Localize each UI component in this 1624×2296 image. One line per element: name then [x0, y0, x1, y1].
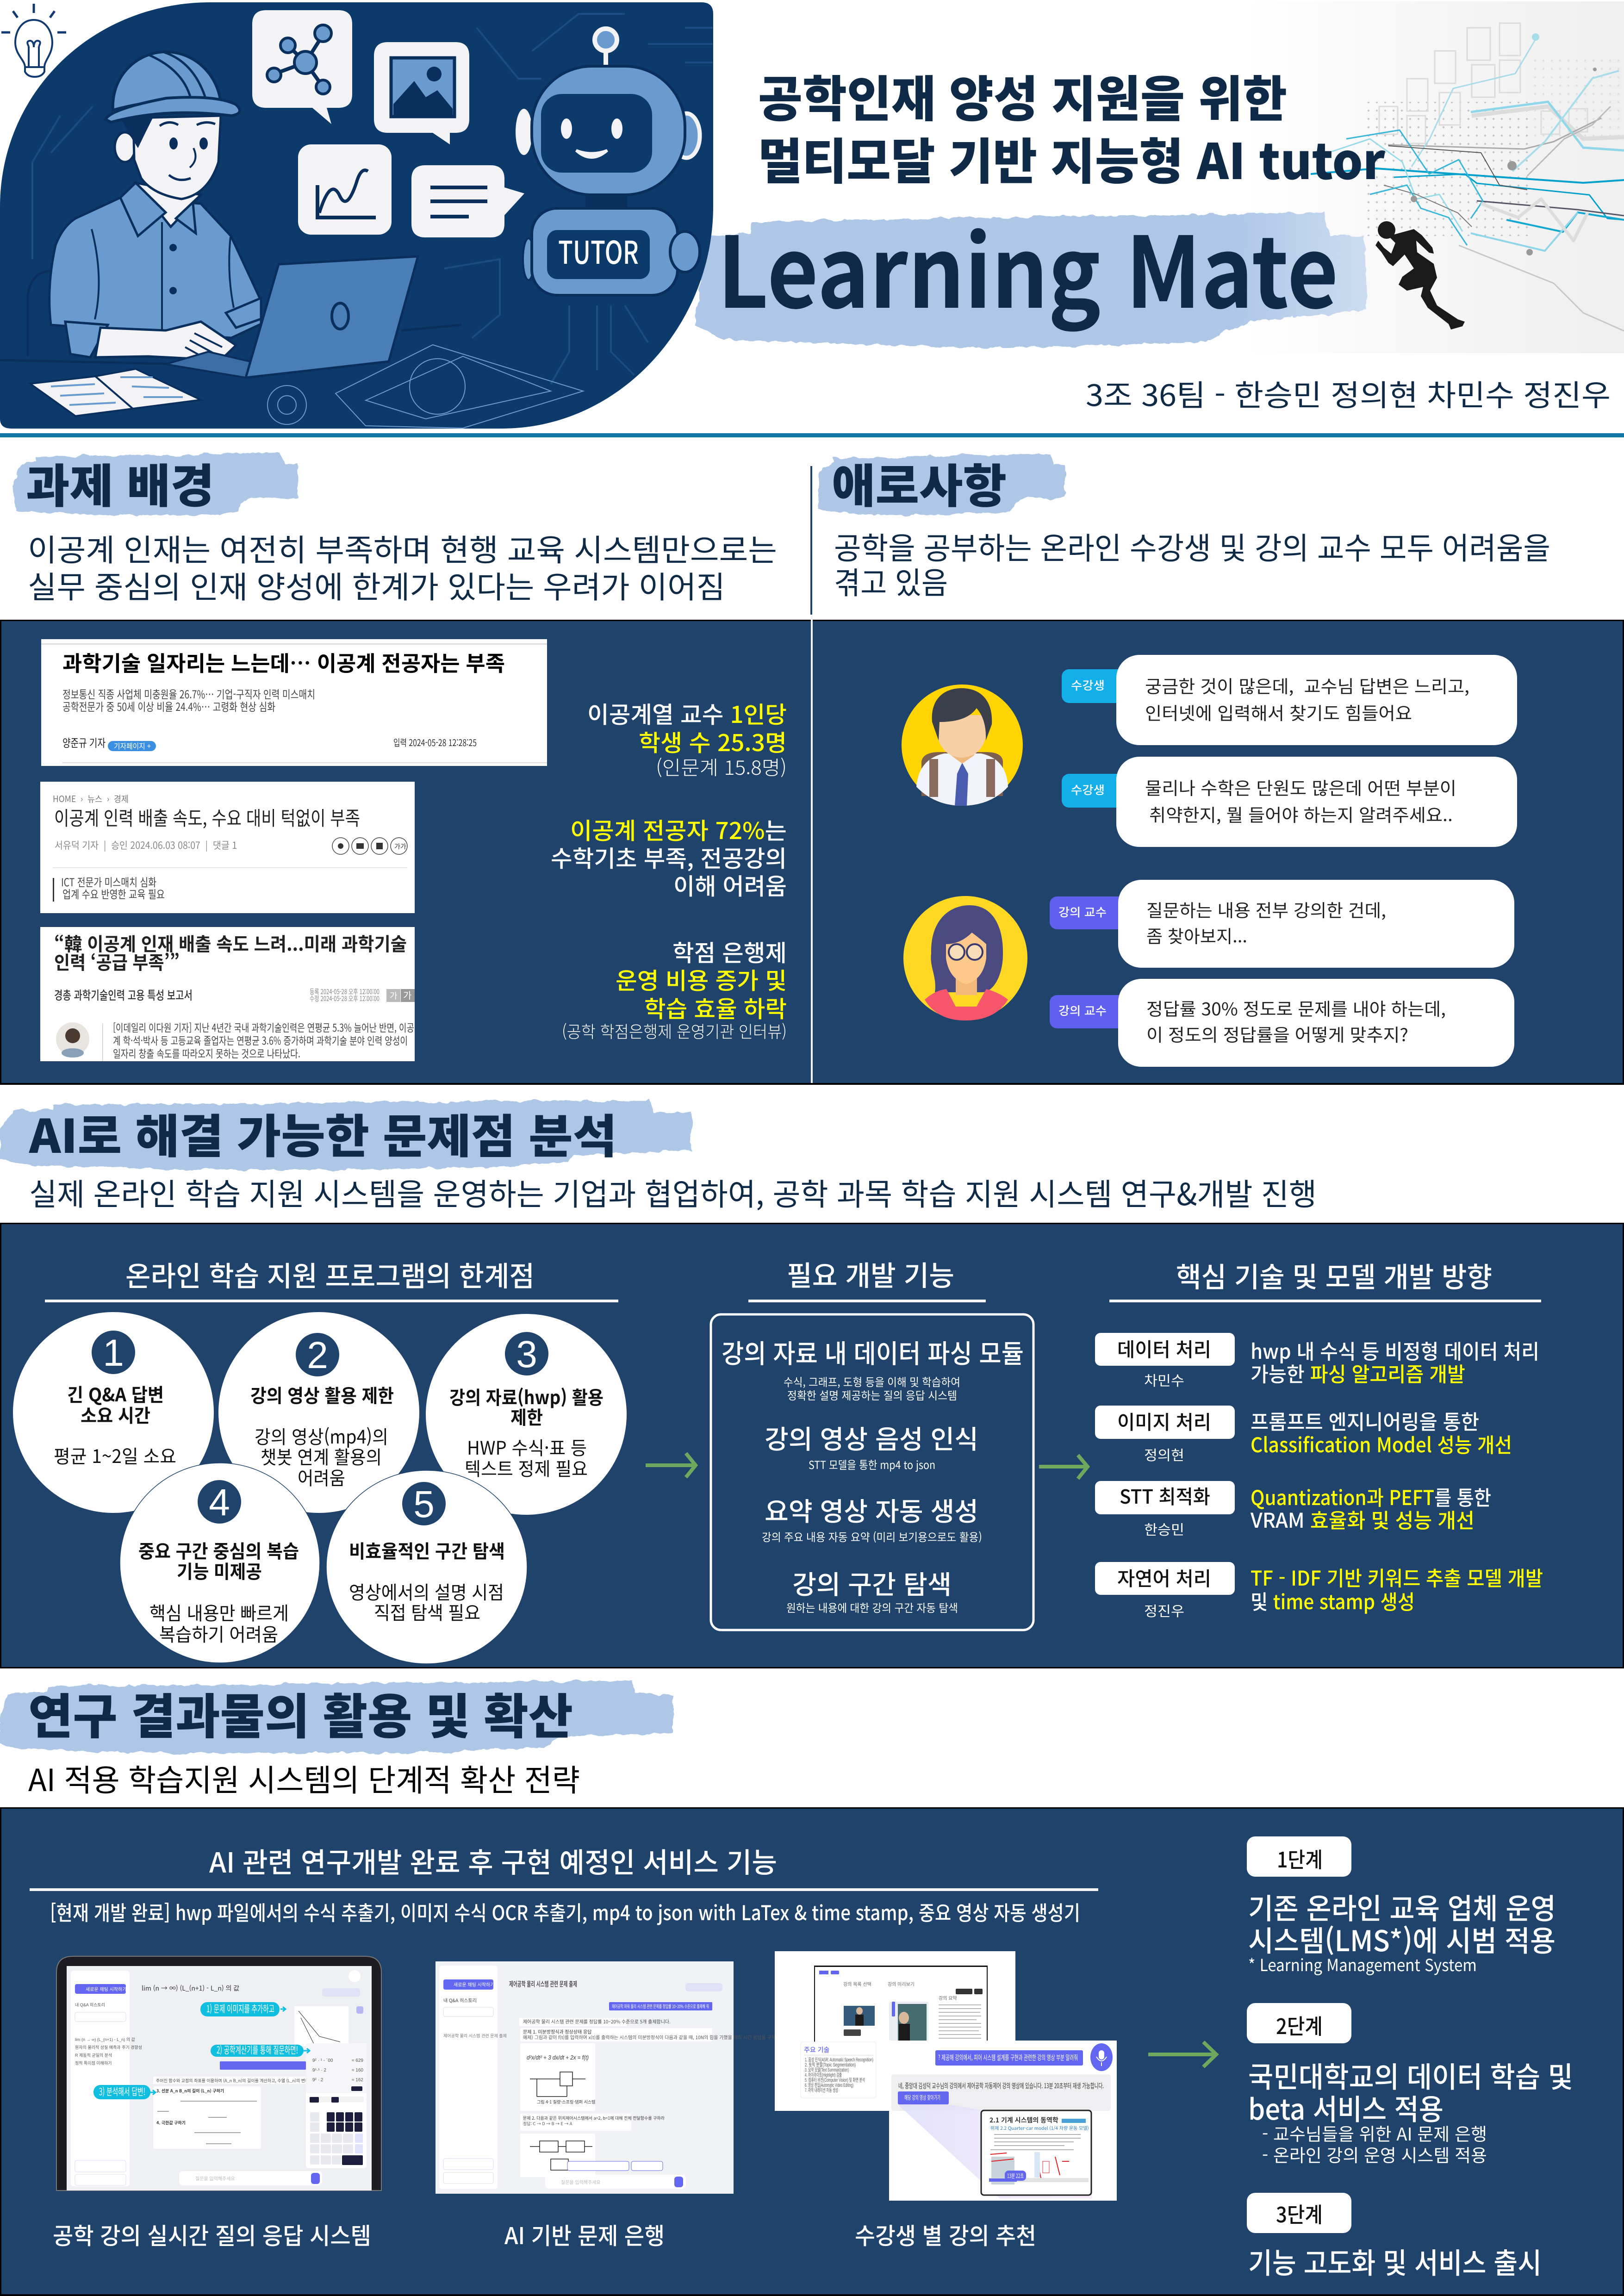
feature 4: 원하는 내용에 대한 강의 구간 자동 탐색 [786, 1599, 958, 1615]
column heading: needed features: 필요 개발 기능 [787, 1254, 954, 1294]
captions [53, 2218, 1036, 2251]
limit circle 1: 긴 Q&A 답변 [67, 1380, 164, 1407]
limit circle 2: 어려움 [298, 1463, 345, 1490]
screenshot: lecture recommendation main: 7. 자막 내레이션 자동 생성 [805, 2087, 838, 2093]
speech bubble 4: 정답률 30% 정도로 문제를 내야 하는데, [1146, 995, 1446, 1020]
limit circle 4: 중요 구간 중심의 복습 [138, 1537, 299, 1563]
limit circle 1: 소요 시간 [81, 1401, 150, 1428]
news card 1: 양준규 기자 [62, 734, 106, 750]
news card 3: 일자리 창출 속도를 따라오지 못하는 것으로 나타났다. [113, 1045, 300, 1061]
speech bubble 4 [1118, 979, 1514, 1067]
stat: credit bank [562, 935, 787, 1043]
input bar: 질문을 입력해주세요 [195, 2175, 235, 2182]
column heading: needed features [748, 1254, 986, 1302]
screenshot: lecture recommendation main: 6. 영상 편집(Automatic Video Editing) [805, 2082, 853, 2088]
screenshot: real-time Q&A system: 새로운 채팅 시작하기 [86, 1985, 126, 1992]
calculator panel [306, 2043, 367, 2168]
speech bubble 2: 물리나 수학은 단원도 많은데 어떤 부분이 [1145, 774, 1456, 800]
feature 4 [786, 1564, 958, 1615]
callouts [93, 2002, 310, 2099]
screenshot: lecture recommendation main: 2. 토픽 분할(Topic Segmentation) [805, 2062, 856, 2068]
title: Learning Mate: Learning Mate [717, 194, 1338, 336]
tag: student 1 [1062, 669, 1126, 703]
news card 3: 계 학·석·박사 등 고등교육 졸업자는 연평균 3.6% 증가하며 과학기술 분야 인력 양성이 [113, 1032, 408, 1048]
text: results description: AI 적용 학습지원 시스템의 단계적 확산 전략 [28, 1756, 580, 1800]
step 2: - 온라인 강의 운영 시스템 적용 [1262, 2141, 1487, 2167]
avatar: student [902, 684, 1023, 806]
role: STT optimization: STT 최적화 [1120, 1481, 1210, 1510]
arrow: features to technologies [1039, 1455, 1088, 1479]
screenshot: lecture recommendation detail: 해당 강의 영상 찾아가기 [904, 2093, 940, 2102]
tag: professor 1 [1050, 896, 1128, 929]
limit circle 1: 평균 1~2일 소요 [54, 1442, 176, 1468]
news card 3: 수정 2024-05-28 오후 12:00:00 [310, 994, 380, 1003]
step 1 [1247, 1836, 1556, 1976]
screenshot: lecture recommendation detail: 위제 2.2 Quarter-car model (1/4 차량 운동 모델) [990, 2124, 1089, 2131]
screenshot: real-time Q&A system [56, 1956, 381, 2190]
input bar [179, 2171, 322, 2185]
role: data processing: 데이터 처리 [1117, 1334, 1211, 1363]
limit circle 3: 제한 [510, 1403, 543, 1430]
feature 3: 강의 주요 내용 자동 요약 (미리 보기용으로도 활용) [762, 1528, 982, 1544]
screenshot: real-time Q&A system: 전체 수정 과목 [80, 2014, 105, 2018]
text: difficulties description: 겪고 있음 [834, 559, 948, 603]
limit circle 1: 1 [103, 1332, 124, 1374]
limit circle 4 [120, 1463, 320, 1663]
screenshot: real-time Q&A system: 주어진 함수와 교점의 좌표를 이용하여 (A_n B_n)의 길이를 계산하고, 수열 (L_n)의 변화량이 어떻게 되는지 극한값 [156, 2078, 355, 2084]
text: background description: 이공계 인재는 여전히 부족하며 현행 교육 시스템만으로는 [28, 526, 777, 570]
tag: student 1: 수강생 [1071, 677, 1105, 693]
news card 1: 기자페이지 + [114, 740, 151, 751]
news card 2: ICT 전문가 미스매치 심화 [61, 873, 156, 890]
robot tutor [516, 29, 700, 295]
step 1: 기존 온라인 교육 업체 운영 [1248, 1885, 1556, 1927]
text: difficulties description [834, 524, 1550, 603]
icon: laptop [166, 256, 418, 378]
role: NLP: 정진우 [1144, 1600, 1184, 1620]
column heading: limits: 온라인 학습 지원 프로그램의 한계점 [125, 1254, 535, 1294]
screenshot: lecture recommendation main: 강의 요약 [939, 1996, 957, 2001]
heading: project background: 과제 배경 [26, 449, 214, 516]
role: STT optimization: 한승민 [1144, 1518, 1184, 1539]
news card 2: 이공계 인력 배출 속도, 수요 대비 턱없이 부족 [54, 803, 360, 831]
role: NLP [1095, 1562, 1543, 1620]
screenshot: real-time Q&A system: R 제동적 균일의 분석 [75, 2053, 112, 2058]
title: project subtitle: 멀티모달 기반 지능형 AI tutor [758, 122, 1386, 193]
stat: students struggling: 이해 어려움 [673, 868, 787, 902]
callouts: 3) 분석해서 답변! [99, 2084, 145, 2098]
step 2 [1247, 2003, 1573, 2167]
screenshot: AI question bank: 문제 1. 미분방정식과 정상상태 응답 [523, 2028, 591, 2035]
feature 1 [722, 1333, 1024, 1403]
screenshot: lecture recommendation main: 5. 컴퓨터 비전(Computer Vision) 및 화면 분석 [805, 2077, 865, 2083]
limit circle 5: 비효율적인 구간 탐색 [349, 1537, 505, 1563]
column heading: core technology [1109, 1255, 1541, 1302]
role: image processing: 정의현 [1144, 1444, 1184, 1464]
screenshot: real-time Q&A system: 3. 선분 A_n B_n의 길이 (L_n) 구하기 [156, 2088, 224, 2094]
news card 2: HOME › 뉴스 › 경제 [53, 792, 129, 805]
role: STT optimization: VRAM 효율화 및 성능 개선 [1250, 1504, 1475, 1534]
news card 2: 업계 수요 반영한 교육 필요 [62, 885, 165, 902]
icon: light bulb [1, 4, 66, 77]
column heading: limits [45, 1254, 618, 1302]
screenshot: AI question bank: 제어공학 물리 시스템 관련 문제를 정답률 10~20% 수준으로 5개 출제합니다. [523, 2018, 671, 2025]
screenshot: real-time Q&A system: 4. 극한값 구하기 [156, 2120, 186, 2126]
role: STT optimization [1095, 1481, 1491, 1539]
limit circle 3: 강의 자료(hwp) 활용 [449, 1383, 604, 1410]
role: data processing [1095, 1333, 1539, 1390]
speech bubble 1 [1116, 655, 1517, 745]
screenshot: lecture recommendation main: 주요 기술 [804, 2045, 830, 2054]
calculator panel: 9² · ¹ - ´00 [312, 2058, 333, 2063]
step 1: * Learning Management System [1248, 1952, 1477, 1976]
bubble: network icon [252, 10, 352, 124]
text: difficulties description: 공학을 공부하는 온라인 수강생 및 강의 교수 모두 어려움을 [834, 524, 1550, 568]
role: NLP: TF - IDF 기반 키워드 추출 모델 개발 [1251, 1562, 1543, 1592]
text: background description [28, 526, 777, 607]
captions: 공학 강의 실시간 질의 응답 시스템 [53, 2218, 371, 2251]
limit circle 4: 복습하기 어려움 [159, 1620, 278, 1647]
heading: planned services [30, 1841, 1098, 1891]
speech bubble 2 [1116, 757, 1517, 847]
role: NLP: 및 time stamp 생성 [1251, 1586, 1415, 1615]
stat: credit bank: 학점 은행제 [672, 935, 787, 968]
title: project subtitle [758, 60, 1386, 193]
speech bubble 3: 좀 찾아보지... [1146, 922, 1247, 948]
limit circle 4: 4 [209, 1481, 230, 1524]
limit circle 2 [218, 1312, 419, 1513]
role: image processing [1095, 1406, 1512, 1464]
news card 3: 등록 2024-05-28 오후 12:00:00 [310, 987, 380, 996]
news card 1: 정보통신 직종 사업체 미충원율 26.7%… 기업-구직자 인력 미스매치 [62, 685, 315, 702]
tag: student 2 [1062, 774, 1126, 808]
screenshot: AI question bank: 그림 4-1 질량-스프링-댐퍼 시스템 [537, 2099, 595, 2105]
screenshot: AI question bank: 질문을 입력해주세요 [561, 2178, 601, 2185]
limit circle 2: 2 [307, 1334, 328, 1376]
news card 3: “韓 이공계 인재 배출 속도 느려...미래 과학기술 [54, 929, 407, 956]
stat: professor ratio: 학생 수 25.3명 [639, 725, 787, 758]
circuit background image [1247, 1, 1624, 353]
screenshot: real-time Q&A system: 내 Q&A 히스토리 [75, 2003, 105, 2007]
screenshot: real-time Q&A system: lim (n → ∞) (L_(n+1) - L_n) 의 값 [75, 2037, 135, 2042]
news card 3: 경총 과학기술인력 고용 특성 보고서 [54, 986, 193, 1003]
calculator panel: ≈ 629 [352, 2058, 363, 2063]
speech bubble 1: 궁금한 것이 많은데, 교수님 답변은 느리고, [1145, 672, 1469, 698]
callouts: 1) 문제 이미지를 추가하고 [206, 2002, 274, 2016]
captions: 수강생 별 강의 추천 [855, 2218, 1036, 2251]
hero illustration: student and AI tutor robot [0, 2, 713, 429]
news card 2 [40, 782, 415, 913]
stat: professor ratio: (인문계 15.8명) [656, 753, 787, 781]
screenshot: lecture recommendation detail [889, 2041, 1117, 2201]
tag: professor 2: 강의 교수 [1058, 1002, 1107, 1019]
arrow: services to rollout [1148, 2042, 1216, 2067]
limit circle 3: 3 [516, 1333, 537, 1375]
limit circle 2: 챗봇 연계 활용의 [261, 1443, 382, 1469]
role: data processing: hwp 내 수식 등 비정형 데이터 처리 [1251, 1335, 1539, 1365]
heading: results usage: 연구 결과물의 활용 및 확산 [28, 1678, 573, 1748]
news card 3: [이데일리 이다원 기자] 지난 4년간 국내 과학기술인력은 연평균 5.3% 늘어난 반면, 이공 [113, 1019, 414, 1035]
calculator panel: ≈ 162 [352, 2078, 363, 2083]
blueprint drawing [268, 345, 583, 428]
limit circle 4: 핵심 내용만 빠르게 [149, 1599, 289, 1625]
speech bubble 1: 인터넷에 입력해서 찾기도 힘들어요 [1145, 699, 1412, 725]
limit circle 4: 기능 미제공 [177, 1557, 262, 1584]
role: data processing: 차민수 [1144, 1369, 1184, 1390]
tag: student 2: 수강생 [1071, 781, 1105, 798]
screenshot: AI question bank [436, 1961, 785, 2194]
stat: credit bank: 운영 비용 증가 및 [616, 963, 787, 996]
limit circle 2: 강의 영상 활용 제한 [250, 1381, 394, 1408]
robot tutor: TUTOR [558, 227, 639, 273]
calculator panel: 9¹·¹ · 2 [312, 2068, 326, 2073]
heading: planned services: AI 관련 연구개발 완료 후 구현 예정인 서비스 기능 [209, 1841, 777, 1881]
role: image processing: 이미지 처리 [1117, 1407, 1211, 1435]
features box [711, 1314, 1033, 1630]
limit circle 5: 직접 탐색 필요 [374, 1598, 480, 1625]
stat: students struggling: 이공계 전공자 72% 는 [570, 813, 787, 846]
avatar: professor [903, 896, 1027, 1020]
panel: results [0, 1807, 1624, 2296]
panel: analysis [0, 1223, 1624, 1668]
feature 4: 강의 구간 탐색 [792, 1564, 952, 1602]
step 2: 2단계 [1276, 2010, 1323, 2041]
title: project subtitle: 공학인재 양성 지원을 위한 [758, 60, 1287, 131]
limit circle 1 [13, 1312, 214, 1513]
news card 3: 가 [403, 988, 411, 1002]
screenshot: AI question bank: 제어공학 물리 시스템 관련 문제 출제 [509, 1979, 577, 1989]
icon: running person [1375, 221, 1465, 330]
limit circle 2: 강의 영상(mp4)의 [255, 1422, 388, 1449]
screenshot: lecture recommendation main: 4. 하이라이트(Highlight) 검출 [805, 2072, 842, 2078]
feature 1: 수식, 그래프, 도형 등을 이해 및 학습하여 [784, 1373, 960, 1389]
feature 1: 강의 자료 내 데이터 파싱 모듈 [722, 1333, 1024, 1371]
screenshot: AI question bank: 내 Q&A 히스토리 [443, 1997, 477, 2004]
step 3 [1247, 2193, 1542, 2282]
news card 1: 과학기술 일자리는 느는데… 이공계 전공자는 부족 [62, 647, 505, 678]
screenshot: AI question bank: 제어공학 파워 물리 시스템 관련 문제를 정답률 10~20% 수준으로 출제해 줘 [612, 2003, 709, 2010]
bubble: text icon [411, 165, 524, 237]
news card 2: 서유덕 기자 | 승인 2024.06.03 08:07 | 댓글 1 [55, 838, 237, 852]
screenshot: lecture recommendation main: 강의 목록 선택 [843, 1982, 871, 1987]
limit circle 5: 5 [413, 1483, 435, 1525]
screenshot: lecture recommendation main: 1. 음성 인식(ASR: Automatic Speech Recognition) [805, 2057, 873, 2063]
stat: professor ratio [587, 697, 787, 781]
heading: difficulties: 애로사항 [832, 449, 1007, 516]
news card 1 [41, 639, 547, 766]
step 2: - 교수님들을 위한 AI 문제 은행 [1262, 2120, 1487, 2146]
feature 3: 요약 영상 자동 생성 [765, 1491, 978, 1529]
limit circle 3 [426, 1314, 627, 1515]
arrow: limits to features [646, 1453, 696, 1477]
stat: students struggling: 수학기초 부족, 전공강의 [551, 840, 787, 874]
role: data processing: 가능한 파싱 알고리즘 개발 [1251, 1358, 1465, 1388]
screenshot: AI question bank: d²x/dt² + 3 dx/dt + 2x = f(t) [527, 2054, 589, 2061]
screenshot: real-time Q&A system: lim (n → ∞) (L_(n+1) - L_n) 의 값 [142, 1984, 239, 1993]
icon: open book [30, 369, 201, 416]
bubble: chart icon [298, 144, 392, 235]
screenshot: lecture recommendation detail: ? 제공해 강의에서, 피어 시스템 설계를 구현과 관련한 강의 영상 부분 알려줘 [938, 2053, 1078, 2062]
screenshot: real-time Q&A system: 정적 특이점 이해하기 [75, 2060, 112, 2066]
heading: problem analysis: AI로 해결 가능한 문제점 분석 [29, 1099, 617, 1166]
stat: credit bank: 학습 효율 하락 [644, 991, 787, 1024]
news card 2: 가가 [394, 842, 406, 851]
screenshot: lecture recommendation main: 3. 요약 모델(Text Summarization) [805, 2066, 849, 2073]
desk line and chair [0, 271, 461, 364]
speech bubble 3 [1118, 880, 1514, 968]
stat: students struggling [551, 813, 787, 902]
news card 3: 가 [390, 989, 398, 1002]
stat: credit bank: (공학 학점은행제 운영기관 인터뷰) [562, 1019, 787, 1043]
limit circle 5: 영상에서의 설명 시점 [349, 1578, 504, 1605]
limit circle 3: 텍스트 정제 필요 [465, 1454, 588, 1481]
screenshot: lecture recommendation detail: 2.1 기계 시스템의 동역학 [989, 2116, 1058, 2125]
team info: 3조 36팀 - 한승민 정의현 차민수 정진우 [1086, 372, 1611, 415]
screenshot: AI question bank: 문제 2. 다음과 같은 위치제어시스템에서 a=2, b=1에 대해 전체 전달함수를 구하라 [523, 2115, 665, 2121]
feature 2: 강의 영상 음성 인식 [765, 1419, 978, 1456]
role: image processing: 프롬프트 엔지니어링을 통한 [1251, 1406, 1479, 1435]
step 1: 시스템(LMS*)에 시범 적용 [1248, 1918, 1556, 1960]
step 1: 1단계 [1277, 1843, 1323, 1874]
step 2: beta 서비스 적용 [1248, 2086, 1444, 2128]
calculator panel: 9² · 2 [312, 2078, 324, 2083]
step 2: 국민대학교의 데이터 학습 및 [1248, 2054, 1573, 2096]
speech bubble 2: 취약한지, 뭘 들어야 하는지 알려주세요.. [1149, 801, 1453, 827]
calculator panel: ≈ 160 [352, 2068, 363, 2073]
step 3: 3단계 [1276, 2198, 1323, 2229]
tag: professor 1: 강의 교수 [1058, 903, 1107, 920]
screenshot: lecture recommendation detail: 네, 중앙대 김성덕 교수님의 강의에서 제어공학 자동제어 강의 영상에 있습니다. 13분 20초부터 재생 가능합니다. [898, 2081, 1104, 2091]
captions: AI 기반 문제 은행 [504, 2218, 665, 2251]
text: completed development: [현재 개발 완료] hwp 파일에서의 수식 추출기, 이미지 수식 OCR 추출기, mp4 to json with LaTex & time stamp, 중요 영상 자동 생성기 [50, 1897, 1080, 1926]
screenshot: real-time Q&A system: 원자의 물리적 성질 예측과 주기 경향성 [75, 2045, 142, 2050]
text: analysis description: 실제 온라인 학습 지원 시스템을 운영하는 기업과 협업하여, 공학 과목 학습 지원 시스템 연구&개발 진행 [29, 1170, 1317, 1214]
screenshot: AI question bank: 새로운 채팅 시작하기 [454, 1981, 494, 1988]
news card 3: 인력 ‘공급 부족’” [54, 948, 180, 975]
limit circle 5 [326, 1470, 527, 1664]
news card 1: 공학전문가 중 50세 이상 비율 24.4%… 고령화 현상 심화 [62, 698, 275, 714]
feature 2: STT 모델을 통한 mp4 to json [809, 1456, 935, 1472]
speech bubble 4: 이 정도의 정답률을 어떻게 맞추지? [1146, 1021, 1408, 1046]
screenshot: lecture recommendation main [775, 1951, 1015, 2111]
text: background description: 실무 중심의 인재 양성에 한계가 있다는 우려가 이어짐 [28, 563, 725, 607]
screenshot: lecture recommendation detail: 13분 22초 [1007, 2171, 1024, 2180]
news card 3 [40, 927, 415, 1061]
screenshot: lecture recommendation main: 강의 미리보기 [888, 1982, 915, 1987]
news card 1: 입력 2024-05-28 12:28:25 [393, 735, 477, 749]
heading: project background [12, 449, 299, 516]
callouts: 2) 공학계산기를 통해 질문하면! [217, 2043, 298, 2057]
icon: man with helmet [50, 52, 261, 360]
feature 3 [762, 1491, 982, 1544]
bubble: image icon [374, 42, 469, 144]
brush stroke behind project name [694, 212, 1367, 348]
stat: professor ratio: 이공계열 교수 1인당 [587, 697, 787, 730]
role: NLP: 자연어 처리 [1117, 1563, 1211, 1592]
column heading: core technology: 핵심 기술 및 모델 개발 방향 [1176, 1255, 1492, 1295]
feature 1: 정확한 설명 제공하는 질의 응답 시스템 [787, 1387, 957, 1403]
role: image processing: Classification Model 성능 개선 [1251, 1429, 1512, 1458]
screenshot: AI question bank: 예제) 그림과 같이 f(t)를 입력하여 x(t)를 출력하는 시스템의 미분방정식이 다음과 같을 때, 10N의 힘을 가했을 때의 시간 응답을 구하시오. [523, 2034, 785, 2041]
speech bubble 3: 질문하는 내용 전부 강의한 건데, [1146, 896, 1386, 922]
heading: difficulties [818, 449, 1065, 516]
panel: background evidence [0, 615, 1624, 1085]
limit circle 3: HWP 수식·표 등 [467, 1433, 587, 1460]
screenshot: AI question bank: 정답: C → D → B → E → A [523, 2121, 572, 2127]
step 3: 기능 고도화 및 서비스 출시 [1248, 2240, 1542, 2282]
tag: professor 2 [1050, 995, 1128, 1028]
role: STT optimization: Quantization과 PEFT를 통한 [1251, 1481, 1491, 1511]
screenshot: AI question bank: 제어공학 물리 시스템 관련 문제 출제 [443, 2033, 507, 2039]
